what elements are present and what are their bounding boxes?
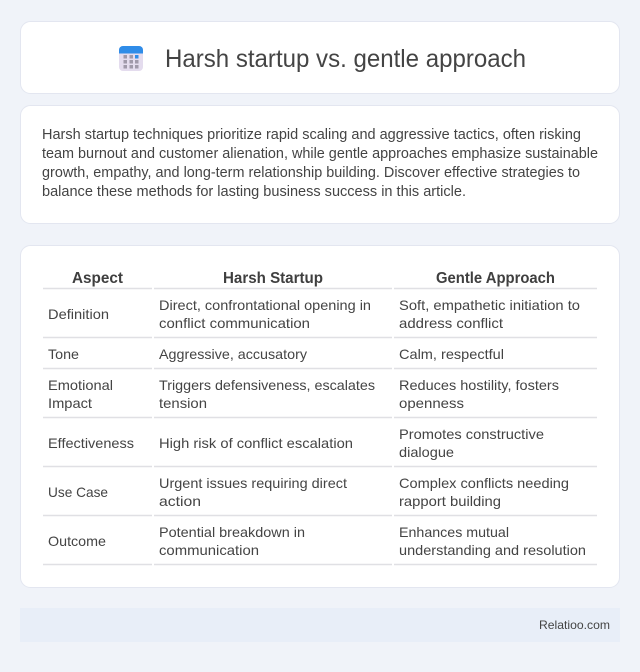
table header row: Harsh Startup [223, 270, 323, 287]
table row: Tone: Aggressive, accusatory [159, 346, 307, 362]
table row: Emotional Impact [48, 377, 559, 411]
panel: introduction [20, 106, 620, 224]
table row: Outcome: Enhances mutual [399, 524, 509, 540]
table header row [72, 270, 555, 287]
table row: Emotional Impact: Emotional [48, 377, 113, 393]
panel: comparison table [20, 246, 620, 588]
table row: Use Case: Use Case [48, 484, 108, 500]
table row: Effectiveness: dialogue [399, 444, 454, 460]
table row: Definition: conflict communication [159, 315, 310, 331]
table row: Use Case: action [159, 493, 201, 509]
footer bar [20, 608, 620, 642]
text block: intro paragraph: growth, empathy, and long-term relationship building. Discover effective strategies to [42, 165, 580, 181]
table row: Use Case: rapport building [399, 493, 501, 509]
table row: Emotional Impact: Triggers defensiveness, escalates [159, 377, 375, 393]
table row: Outcome: Outcome [48, 533, 106, 549]
table row: Effectiveness: Effectiveness [48, 435, 134, 451]
table row: Effectiveness: High risk of conflict escalation [159, 435, 353, 451]
table row: Outcome: Potential breakdown in [159, 524, 305, 540]
table row: Effectiveness: Promotes constructive [399, 426, 544, 442]
table header row: Aspect [72, 270, 123, 287]
text block: intro paragraph: balance these methods for lasting business success in this article. [42, 184, 466, 200]
table row: Definition: Direct, confrontational opening in [159, 297, 371, 313]
table row: Emotional Impact: tension [159, 395, 207, 411]
table row: Tone [48, 346, 504, 362]
table row: Outcome: communication [159, 542, 259, 558]
table row: Emotional Impact: Impact [48, 395, 92, 411]
icon: calendar [119, 46, 143, 71]
table row: Tone: Tone [48, 346, 79, 362]
table row: Definition: Definition [48, 306, 109, 322]
table row: Use Case: Complex conflicts needing [399, 475, 569, 491]
table row: Definition: Soft, empathetic initiation to [399, 297, 580, 313]
table row: Use Case [48, 475, 569, 509]
table row: Use Case: Urgent issues requiring direct [159, 475, 347, 491]
table row: Definition: address conflict [399, 315, 503, 331]
text block: intro paragraph: Harsh startup techniques prioritize rapid scaling and aggressive tactics, often risking [42, 127, 581, 143]
table row: Emotional Impact: Reduces hostility, fosters [399, 377, 559, 393]
table row: Definition [48, 297, 580, 331]
title: Harsh startup vs. gentle approach [165, 45, 526, 73]
panel: title header [20, 22, 620, 94]
text block: intro paragraph: team burnout and customer alienation, while gentle approaches emphasize sustainable [42, 146, 598, 162]
table row: Outcome [48, 524, 586, 558]
table header row: Gentle Approach [436, 270, 555, 287]
footer credit: Relatioo.com [539, 618, 610, 632]
table row: Effectiveness [48, 426, 544, 460]
table row: Outcome: understanding and resolution [399, 542, 586, 558]
text block: intro paragraph [42, 127, 598, 200]
table row: Emotional Impact: openness [399, 395, 464, 411]
table row: Tone: Calm, respectful [399, 346, 504, 362]
